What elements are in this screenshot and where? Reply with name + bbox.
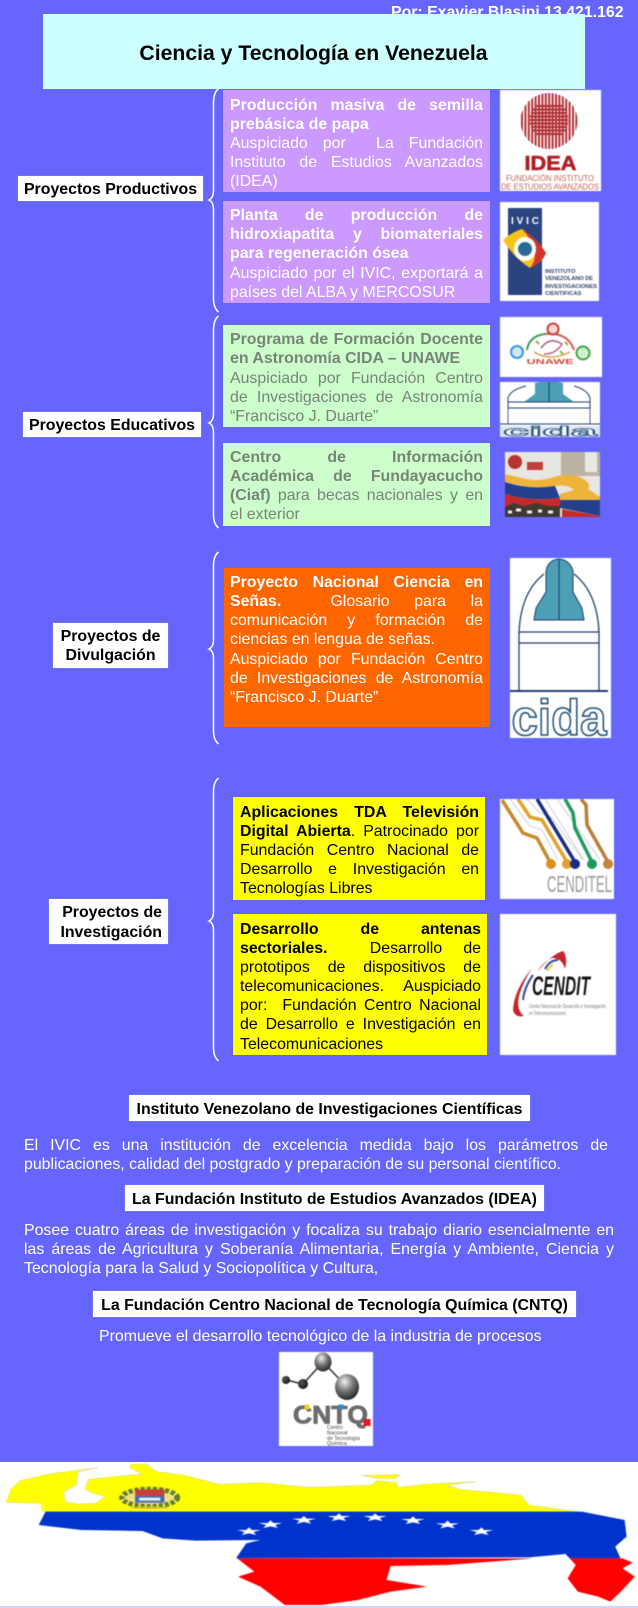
panel text: el exterior — [230, 506, 300, 523]
label: proyectos productivos: Proyectos Productivos — [24, 181, 197, 198]
illustration: mapa de Venezuela con bandera — [6, 1463, 636, 1606]
brace: proyectos productivos — [207, 88, 219, 312]
panel text: sectoriales. Desarrollo de — [240, 940, 481, 957]
panel text: Programa de Formación Docente — [230, 331, 483, 348]
panel text: Fundación Centro Nacional de — [240, 842, 479, 859]
icon: logo CNTQ — [278, 1351, 374, 1447]
icon: logo IVIC: VENEZOLANO DE — [545, 276, 593, 282]
franja inferior clara — [0, 1606, 638, 1608]
icon: logo IVIC — [499, 201, 600, 302]
label: proyectos de investigación: Proyectos de — [62, 904, 162, 921]
icon: logo CIDA grande — [509, 557, 612, 739]
panel text: comunicación y formación de — [230, 612, 483, 629]
icon: logo CNTQ: de Tecnología — [327, 1436, 360, 1442]
panel text: en Astronomía CIDA – UNAWE — [230, 350, 460, 367]
heading: IVIC — [129, 1095, 530, 1121]
panel: semilla de papa — [223, 90, 490, 192]
panel text: Centro de Información — [230, 449, 483, 466]
panel text — [230, 331, 483, 425]
panel text — [240, 804, 479, 897]
panel text — [230, 574, 483, 706]
panel text: de Desarrollo e Investigación en — [240, 1016, 481, 1033]
panel: centro de información académica — [223, 443, 490, 526]
title: Ciencia y Tecnología en Venezuela — [139, 42, 488, 65]
panel text: Planta de producción de — [230, 207, 483, 224]
panel: franja blanca inferior — [0, 1462, 638, 1606]
panel text: Tecnologías Libres — [240, 880, 373, 897]
panel text: Auspiciado por Fundación Centro — [230, 651, 483, 668]
panel text: países del ALBA y MERCOSUR — [230, 284, 455, 301]
text block: IDEA: Posee cuatro áreas de investigación y focaliza su trabajo diario esencialmente en — [24, 1222, 614, 1239]
icon: logo CENDIT: en Telecomunicaciones — [529, 1011, 566, 1017]
panel text: ciencias en lengua de señas. — [230, 631, 435, 648]
panel text: (IDEA) — [230, 173, 278, 190]
panel text: prebásica de papa — [230, 116, 369, 133]
text block: IDEA: Tecnología para la Salud y Sociopolítica y Cultura, — [24, 1260, 378, 1277]
panel text — [230, 207, 483, 301]
panel text: por: Fundación Centro Nacional — [240, 997, 481, 1014]
panel text: de Investigaciones de Astronomía — [230, 670, 483, 687]
panel text: (Ciaf) para becas nacionales y en — [230, 487, 483, 504]
icon: logo CIDA pequeño — [499, 381, 601, 438]
text block: IDEA: las áreas de Agricultura y Soberanía Alimentaria, Energía y Ambiente, Ciencia y — [24, 1241, 614, 1258]
text block: CNTQ: Promueve el desarrollo tecnológico de la industria de procesos — [99, 1328, 542, 1345]
label: proyectos de investigación: Investigación — [60, 924, 162, 941]
panel: hidroxiapatita — [223, 201, 490, 303]
panel text: Proyecto Nacional Ciencia en — [230, 574, 483, 591]
label: proyectos de investigación — [49, 899, 168, 944]
label: proyectos de divulgación: Proyectos de — [61, 628, 160, 645]
icon: logo UNAWE: UNAWE — [526, 357, 574, 366]
panel text: Auspiciado por Fundación Centro — [230, 370, 483, 387]
map: franja roja oeste — [237, 1558, 533, 1605]
brace: proyectos educativos — [207, 316, 219, 528]
heading: IDEA: La Fundación Instituto de Estudios Avanzados (IDEA) — [132, 1191, 537, 1208]
heading: IVIC: Instituto Venezolano de Investigaciones Científicas — [137, 1101, 522, 1118]
panel text: para regeneración ósea — [230, 245, 408, 262]
panel text: Desarrollo e Investigación en — [240, 861, 479, 878]
icon: logo CENDIT — [499, 913, 617, 1056]
icon: logo UNAWE — [499, 316, 603, 378]
panel text: Señas. Glosario para la — [230, 593, 483, 610]
panel text: Auspiciado por el IVIC, exportará a — [230, 265, 483, 282]
panel: formación docente en astronomía — [223, 325, 490, 427]
panel text: Instituto de Estudios Avanzados — [230, 154, 483, 171]
heading: IDEA — [125, 1185, 544, 1211]
panel text: Aplicaciones TDA Televisión — [240, 804, 479, 821]
icon: logo IDEA: FUNDACIÓN INSTITUTO — [506, 173, 594, 183]
icon: logo CENDITEL — [499, 798, 615, 900]
panel: ciencia en señas — [224, 568, 490, 727]
icon: logo IDEA — [499, 89, 602, 192]
icon: logo CNTQ: Nacional — [327, 1430, 348, 1436]
map: franja roja este — [568, 1558, 635, 1602]
map: estrellas — [237, 1513, 493, 1535]
brace: proyectos de investigación — [207, 778, 219, 1062]
panel text: “Francisco J. Duarte” — [230, 408, 378, 425]
panel text: Digital Abierta. Patrocinado por — [240, 823, 479, 840]
map: franja amarilla — [6, 1464, 578, 1512]
label: proyectos productivos — [18, 176, 203, 201]
panel text: Desarrollo de antenas — [240, 921, 481, 938]
brace: proyectos de divulgación — [207, 552, 219, 744]
heading: CNTQ: La Fundación Centro Nacional de Tecnología Química (CNTQ) — [101, 1297, 568, 1314]
panel text: Académica de Fundayacucho — [230, 468, 483, 485]
text block: IVIC: El IVIC es una institución de excelencia medida bajo los parámetros de — [24, 1137, 608, 1154]
heading: CNTQ — [93, 1291, 576, 1317]
text block: IDEA — [24, 1222, 614, 1277]
panel text: de Investigaciones de Astronomía — [230, 389, 483, 406]
icon: logo IVIC: CIENTIFICAS — [545, 291, 582, 297]
panel: antenas sectoriales — [233, 914, 487, 1055]
panel: aplicaciones TDA — [233, 797, 485, 900]
panel text: hidroxiapatita y biomateriales — [230, 226, 483, 243]
panel text: Telecomunicaciones — [240, 1036, 383, 1053]
icon: logo IDEA: IDEA — [524, 153, 576, 175]
label: proyectos de divulgación — [53, 623, 168, 668]
panel text: “Francisco J. Duarte” — [230, 689, 378, 706]
icon: imagen Fundayacucho — [504, 451, 601, 518]
panel text — [230, 449, 483, 523]
title — [43, 14, 585, 89]
panel text — [240, 921, 481, 1053]
icon: logo IVIC: I V I C — [511, 216, 539, 227]
panel text: prototipos de dispositivos de — [240, 959, 481, 976]
icon: logo IVIC: INSTITUTO — [545, 269, 576, 275]
icon: logo CNTQ: Centro — [327, 1425, 343, 1431]
text block: IVIC — [24, 1137, 608, 1173]
label: proyectos educativos: Proyectos Educativos — [29, 417, 195, 434]
panel text: Producción masiva de semilla — [230, 97, 483, 114]
map: franja azul — [39, 1512, 627, 1558]
icon: logo CNTQ: CNTQ — [293, 1402, 368, 1430]
label: proyectos de divulgación: Divulgación — [65, 647, 156, 664]
icon: logo IVIC: INVESTIGACIONES — [545, 284, 597, 290]
text block: IVIC: publicaciones, calidad del postgrado y preparación de su personal científico. — [24, 1156, 561, 1173]
map: escudo — [122, 1489, 177, 1509]
panel text: telecomunicaciones. Auspiciado — [240, 978, 481, 995]
panel text: Auspiciado por La Fundación — [230, 135, 483, 152]
author credit: Por: Exavier Blasini 13.421.162 — [391, 4, 624, 21]
label: proyectos educativos — [23, 412, 201, 437]
panel text — [230, 97, 483, 190]
